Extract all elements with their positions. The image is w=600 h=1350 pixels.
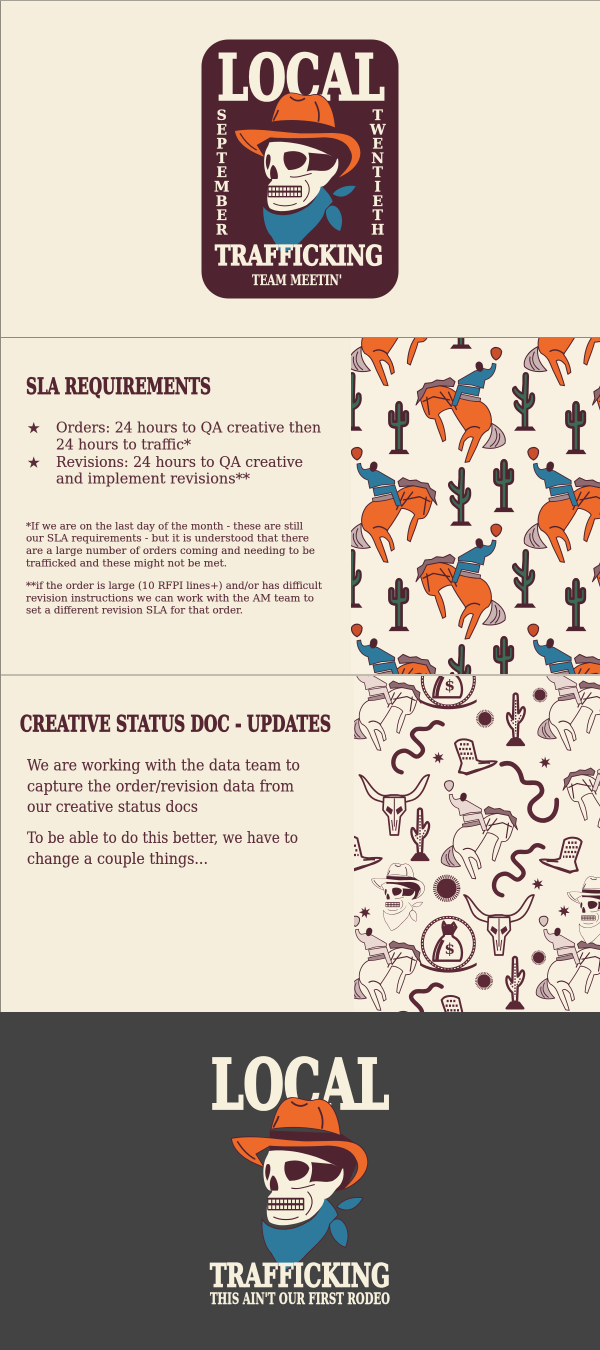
- footnote: last day of month: [26, 520, 315, 569]
- badge heading: TRAFFICKING: TRAFFICKING: [215, 241, 383, 272]
- bullet list: Revisions: 24 hours to QA creative: [56, 455, 303, 471]
- heading: Creative Status Doc - Updates: CREATIVE STATUS DOC - UPDATES: [20, 712, 331, 738]
- footnote: last day of month: trafficked and these might not be met.: [26, 557, 227, 569]
- heading: SLA Requirements: SLA REQUIREMENTS: [26, 374, 211, 400]
- paragraph: change a couple things: change a couple things...: [27, 850, 208, 868]
- closing heading: TRAFFICKING: TRAFFICKING: [210, 1257, 390, 1295]
- panel: SLA requirements: [26, 338, 600, 674]
- paragraph: change a couple things: [27, 829, 298, 868]
- footnote: last day of month: *If we are on the last day of the month - these are still: [26, 520, 304, 532]
- closing tagline: THIS AIN'T OUR FIRST RODEO: [210, 1289, 390, 1308]
- bullet list: Orders: 24 hours to QA creative then: [56, 421, 321, 437]
- paragraph: data team: [27, 757, 300, 816]
- panel: creative status doc updates: [20, 676, 600, 1012]
- pattern items: [354, 676, 600, 1012]
- paragraph: data team: We are working with the data team to: [27, 757, 300, 775]
- pattern: western line art: [354, 676, 600, 1012]
- footnote: last day of month: are a large number of orders coming and needing to be: [26, 545, 315, 557]
- icon: cowboy skull with hat and bandana: [232, 1098, 367, 1271]
- icon: cowboy skull with hat and bandana: [235, 93, 360, 253]
- footnote: large orders: set a different revision SLA for that order.: [26, 605, 243, 617]
- footnote: last day of month: our SLA requirements - but it is understood that there: [26, 533, 309, 545]
- vertical text: September: SEPTEMBER: [214, 108, 229, 238]
- badge heading: LOCAL: LOCAL: [218, 41, 384, 115]
- closing heading: LOCAL: LOCAL: [211, 1045, 389, 1125]
- bullet list: ★: [27, 419, 40, 437]
- footnote: large orders: **if the order is large (10 RFPI lines+) and/or has difficult: [26, 580, 323, 592]
- badge subtitle: Team Meetin': TEAM MEETIN': [252, 273, 342, 289]
- bullet list: ★: [27, 454, 40, 472]
- paragraph: data team: capture the order/revision data from: [27, 778, 294, 796]
- bullet list: and implement revisions**: [56, 472, 251, 488]
- footnote: large orders: [26, 580, 323, 617]
- badge: Local Trafficking team meetin': [202, 40, 398, 298]
- paragraph: data team: our creative status docs: [27, 798, 198, 816]
- vertical text: Twentieth: TWENTIETH: [369, 108, 386, 238]
- pattern items: [351, 338, 600, 674]
- panel: title slide: [0, 0, 600, 1012]
- bullet list: 24 hours to traffic*: [56, 438, 192, 454]
- bullet list: [27, 419, 321, 488]
- panel: closing slide: [0, 1012, 600, 1350]
- footnote: large orders: revision instructions we can work with the AM team to: [26, 592, 314, 604]
- paragraph: change a couple things: To be able to do this better, we have to: [27, 829, 298, 847]
- pattern: bronco riders and cacti: [351, 338, 600, 674]
